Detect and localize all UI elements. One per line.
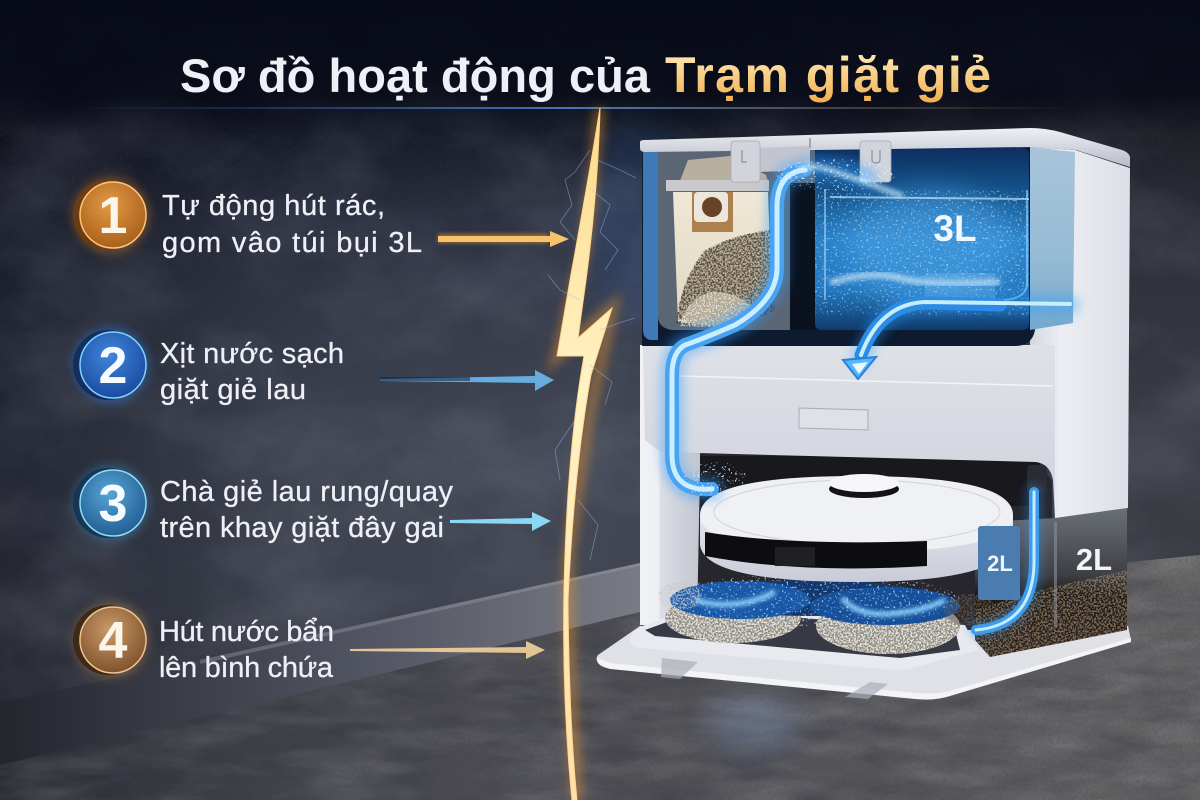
- step 3: [73, 465, 551, 544]
- step 4 arrow: [350, 641, 545, 659]
- small water tank 2L: [978, 526, 1020, 600]
- step 1 text: [162, 190, 422, 259]
- blue water flow tube: dirty water to tank: [976, 492, 1034, 630]
- number badge 2: [73, 327, 149, 403]
- robot sensor band: [705, 532, 927, 568]
- step 4: [73, 602, 545, 684]
- label: 3L: 3L: [933, 208, 977, 249]
- blue water flow tube: clean water path: [672, 159, 900, 498]
- robot vacuum: [700, 474, 1013, 582]
- washing pads with water splash: [658, 574, 996, 654]
- number badge 3: [73, 465, 149, 541]
- step 4 text: [159, 616, 334, 684]
- step 2 arrow: [380, 370, 554, 391]
- station: docking station body: [596, 128, 1131, 700]
- step 3 text: [160, 476, 454, 544]
- number badge 1: 1: [99, 187, 127, 245]
- station base plate: [596, 626, 1131, 700]
- step 2 text: Xịt nước sạch: [160, 338, 344, 370]
- dust bag: [666, 156, 775, 328]
- step 1 text: Tự động hút rác,: [162, 190, 385, 222]
- step 1 arrow: [438, 231, 569, 247]
- lidar turret: [829, 474, 899, 498]
- title: [60, 47, 1070, 109]
- clean water tank 3L: [815, 148, 1029, 330]
- right side panel: [1030, 147, 1130, 520]
- step 3 text: Chà giẻ lau rung/quay: [160, 476, 454, 508]
- step 3 text: trên khay giặt đây gai: [160, 512, 444, 544]
- translucent side of tank: [1030, 147, 1075, 330]
- connection pipe top: [1027, 465, 1047, 493]
- step 3 arrow: [450, 512, 551, 531]
- step 1 text: gom vâo túi bụi 3L: [162, 227, 422, 259]
- blue water flow arrow: from tank to tray: [843, 302, 1070, 379]
- lightning bolt divider: [548, 108, 636, 800]
- dirty water tank 2L: 2L: [1076, 542, 1112, 577]
- small electric branches: [548, 150, 636, 560]
- upper frame: [642, 148, 1035, 346]
- washing tray: [630, 605, 978, 670]
- number badge 1: [73, 177, 149, 253]
- title: Sơ đồ hoạt động của: [180, 49, 651, 102]
- number badge 3: 3: [99, 475, 127, 533]
- step 2 text: giặt giẻ lau: [160, 374, 306, 406]
- step 2: [73, 327, 554, 406]
- step 2 text: [160, 338, 344, 406]
- middle white panel: [643, 345, 1055, 520]
- step 4 text: lên bình chứa: [159, 652, 334, 684]
- title: Trạm giặt giẻ: [665, 47, 991, 103]
- left pillar: [640, 345, 700, 625]
- step 4 text: Hút nước bẩn: [159, 616, 334, 648]
- number badge 4: [73, 602, 149, 678]
- number badge 4: 4: [99, 612, 128, 670]
- lower cavity: [690, 452, 1052, 630]
- number badge 2: 2: [99, 337, 127, 395]
- small water tank 2L: 2L: [987, 551, 1013, 576]
- step 1: [73, 177, 569, 259]
- handle clips: [731, 141, 891, 182]
- top lid: [640, 128, 1130, 172]
- dirty water tank 2L: [975, 508, 1127, 657]
